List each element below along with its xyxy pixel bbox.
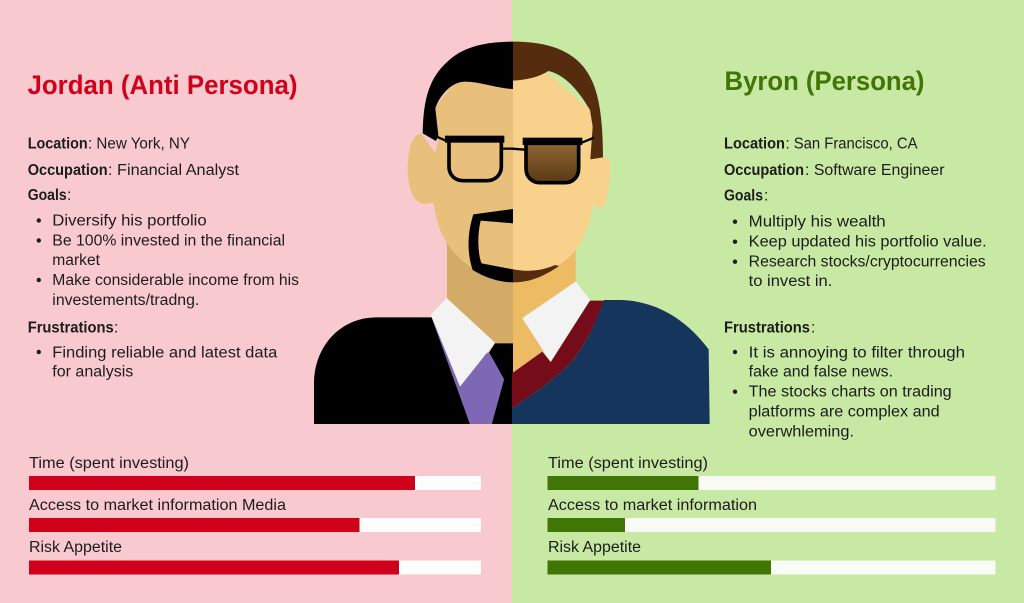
right glasses xyxy=(512,138,594,183)
text block: Byron frustrations: fake and false news. xyxy=(749,364,893,381)
text block: Jordan goals: investements/tradng. xyxy=(52,292,199,309)
text block: Byron occupation xyxy=(724,162,944,179)
text block: Jordan goals: : xyxy=(67,187,71,204)
bar: Jordan time spent investing: Time (spent investing) xyxy=(29,455,189,472)
text block: Byron goals xyxy=(724,188,987,290)
bar chart: Jordan metrics xyxy=(29,455,481,574)
goatee xyxy=(469,209,513,282)
text block: Byron goals: Goals xyxy=(724,188,763,205)
text block: Byron goals: Keep updated his portfolio value. xyxy=(749,234,987,251)
heading: Jordan: Jordan (Anti Persona) xyxy=(28,70,298,100)
right collar xyxy=(522,281,590,362)
text block: Jordan location: : New York, NY xyxy=(88,136,190,153)
jacket xyxy=(314,317,470,424)
text block: Byron frustrations xyxy=(724,320,965,441)
bar: Jordan time spent investing xyxy=(29,455,481,490)
portrait: split-face illustration xyxy=(314,42,710,424)
bar: Jordan risk appetite: Risk Appetite xyxy=(29,539,122,556)
text block: Byron goals: : xyxy=(764,188,768,205)
text block: Byron location: : San Francisco, CA xyxy=(786,136,918,153)
tie xyxy=(432,317,504,424)
left collar xyxy=(431,298,495,387)
bar: Byron risk appetite: Risk Appetite xyxy=(548,539,641,556)
text block: Jordan frustrations: : xyxy=(114,320,118,337)
bar: Byron time spent investing xyxy=(548,455,996,490)
right hair xyxy=(513,42,603,159)
left glasses xyxy=(437,136,514,181)
text block: Jordan frustrations: Frustrations xyxy=(28,320,114,337)
text block: Jordan frustrations: for analysis xyxy=(52,364,134,381)
sweater v-neck trim xyxy=(512,301,604,408)
text block: Jordan location xyxy=(28,136,190,153)
text block: Jordan goals: Goals xyxy=(28,187,67,204)
text block: Byron frustrations: platforms are complex and xyxy=(749,404,940,421)
left hair xyxy=(423,42,513,141)
panel: Jordan anti persona xyxy=(0,0,512,603)
text block: Jordan goals xyxy=(28,187,299,309)
text block: Byron frustrations: The stocks charts on trading xyxy=(749,384,952,401)
text block: Jordan occupation: Occupation xyxy=(28,162,108,179)
panel: Byron persona xyxy=(512,0,1024,603)
sweater xyxy=(512,300,710,424)
left half: Jordan figure xyxy=(314,42,514,424)
text block: Byron frustrations: Frustrations xyxy=(724,320,810,337)
right beard xyxy=(513,265,559,282)
text block: Byron location xyxy=(724,136,918,153)
heading: Byron: Byron (Persona) xyxy=(724,66,924,96)
bar: Jordan access to market information: Access to market information Media xyxy=(29,497,286,514)
text block: Jordan goals: Make considerable income from his xyxy=(52,272,299,289)
text block: Byron occupation: : Software Engineer xyxy=(805,162,944,179)
text block: Jordan goals: Diversify his portfolio xyxy=(52,213,207,230)
right half: Byron figure xyxy=(512,42,710,424)
bar: Jordan risk appetite xyxy=(29,539,481,574)
text block: Jordan occupation xyxy=(28,162,240,179)
text block: Jordan location: Location xyxy=(28,136,88,153)
text block: Byron frustrations: : xyxy=(811,320,815,337)
text block: Byron goals: Research stocks/cryptocurrencies xyxy=(749,254,986,271)
text block: Byron goals: to invest in. xyxy=(749,273,832,290)
bar: Byron access to market information: Access to market information xyxy=(548,497,757,514)
text block: Byron goals: Multiply his wealth xyxy=(749,214,886,231)
text block: Byron frustrations: It is annoying to filter through xyxy=(749,344,965,361)
text block: Jordan frustrations xyxy=(28,320,278,381)
bar: Jordan access to market information xyxy=(29,497,481,532)
bar: Byron time spent investing: Time (spent investing) xyxy=(548,455,708,472)
text block: Byron occupation: Occupation xyxy=(724,162,804,179)
bar: Byron risk appetite xyxy=(548,539,996,574)
text block: Jordan goals: market xyxy=(52,252,101,269)
text block: Jordan goals: Be 100% invested in the financial xyxy=(52,233,285,250)
tie knot and lapel xyxy=(489,343,513,424)
text block: Jordan frustrations: Finding reliable and latest data xyxy=(52,344,278,361)
text block: Byron location: Location xyxy=(724,136,785,153)
text block: Jordan occupation: : Financial Analyst xyxy=(108,162,240,179)
bar: Byron access to market information xyxy=(548,497,996,532)
text block: Byron frustrations: overwhleming. xyxy=(749,424,854,441)
bar chart: Byron metrics xyxy=(548,455,996,574)
